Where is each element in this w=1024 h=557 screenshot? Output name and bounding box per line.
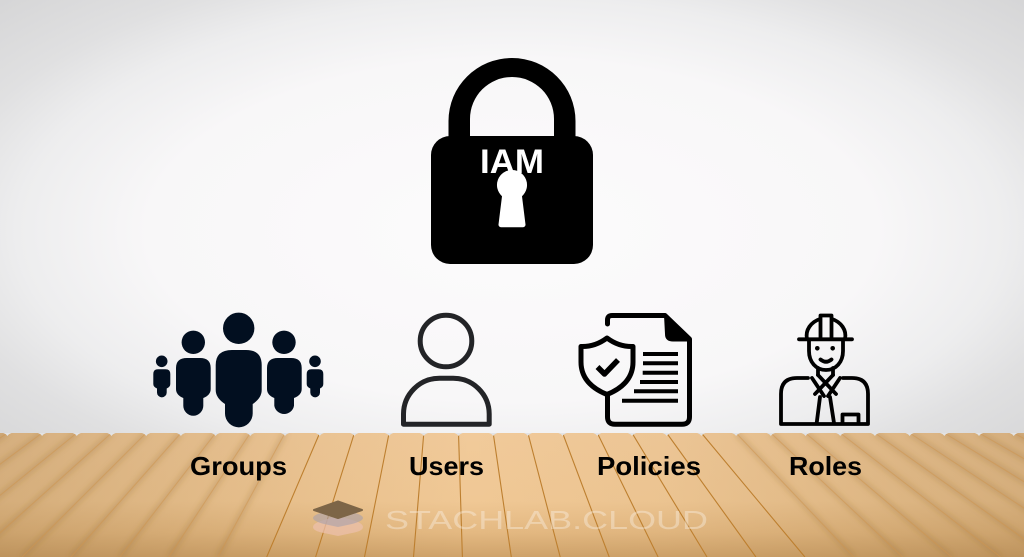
padlock label: IAM	[480, 143, 544, 181]
icon: user	[404, 315, 489, 424]
label: Roles: Roles	[789, 451, 862, 481]
icon: groups	[153, 313, 323, 427]
watermark text: STACHLAB.CLOUD	[385, 505, 708, 535]
icon: policy document with shield	[581, 315, 690, 424]
label: Groups: Groups	[190, 451, 287, 481]
watermark logo	[313, 502, 363, 536]
icon: engineer role	[781, 316, 868, 424]
label: Users: Users	[409, 451, 484, 481]
icon: IAM padlock	[431, 58, 593, 264]
label: Policies: Policies	[597, 451, 701, 481]
wooden floor	[0, 432, 1024, 557]
keyhole	[497, 170, 527, 227]
